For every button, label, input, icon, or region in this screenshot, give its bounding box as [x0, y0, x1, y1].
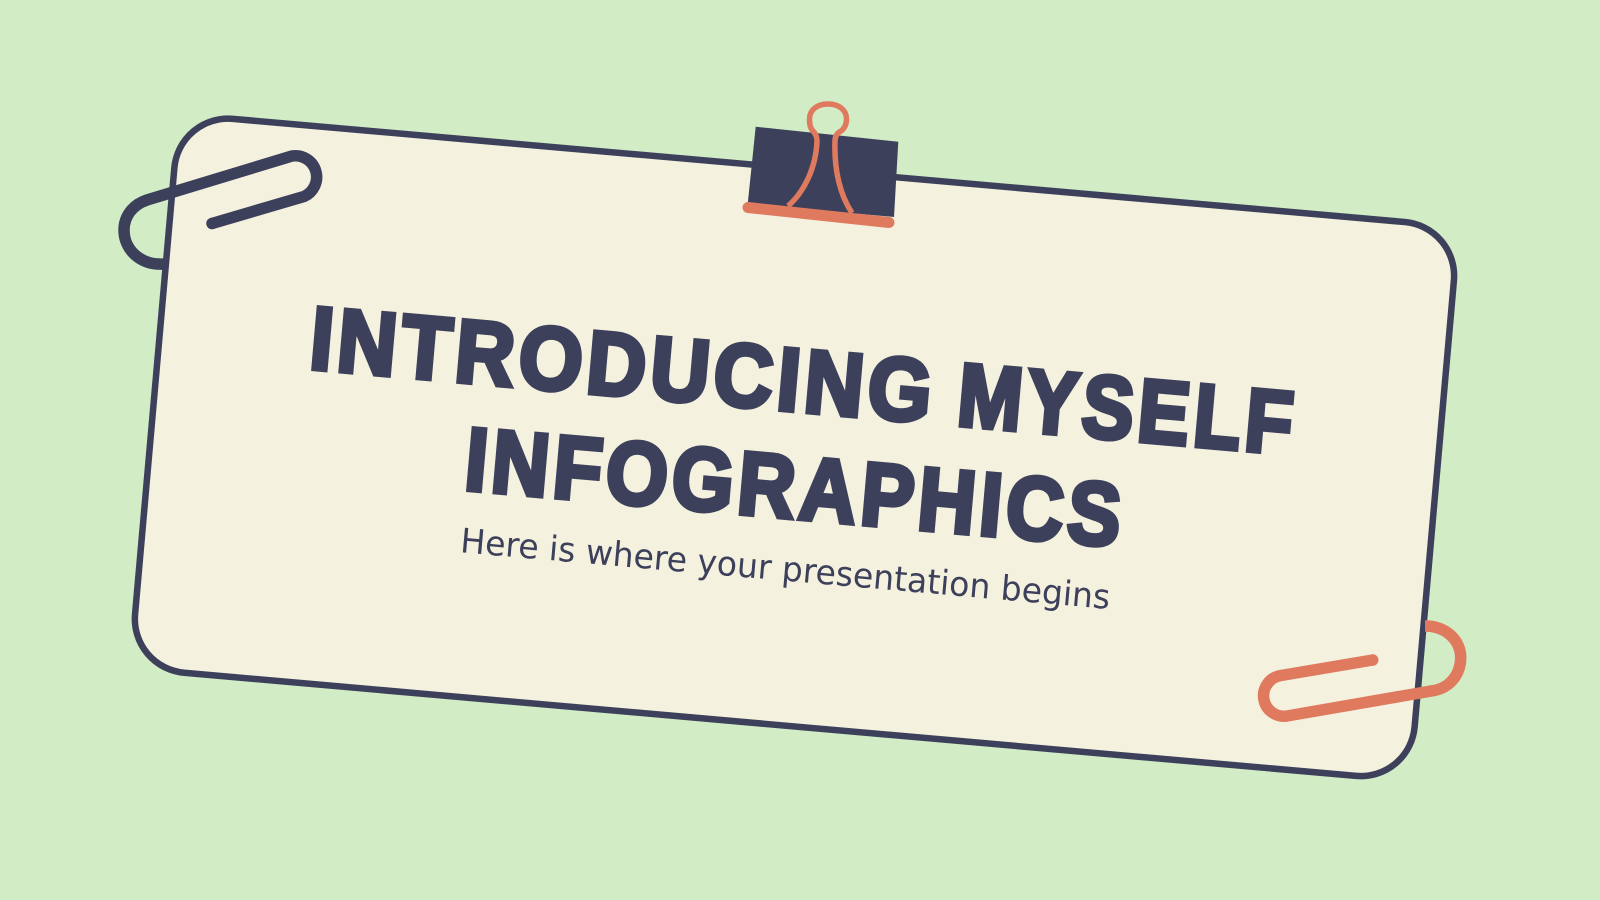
- panel: tilted card: [130, 114, 1459, 781]
- title line 1: MYSELF: [954, 344, 1301, 473]
- clip wire handle: [788, 104, 852, 213]
- title line 1: [306, 288, 1301, 473]
- clip body: [748, 127, 898, 217]
- icon: orange paperclip: [1264, 626, 1461, 716]
- title line 2: INFOGRAPHICS: [461, 409, 1130, 566]
- title and subtitle: [292, 288, 1301, 633]
- icon: navy paperclip: [124, 156, 317, 264]
- clip base bar: [748, 208, 889, 222]
- title line 1: INTRODUCING: [306, 288, 941, 442]
- icon: binder clip: [748, 104, 898, 222]
- subtitle: Here is where your presentation begins: [459, 521, 1112, 618]
